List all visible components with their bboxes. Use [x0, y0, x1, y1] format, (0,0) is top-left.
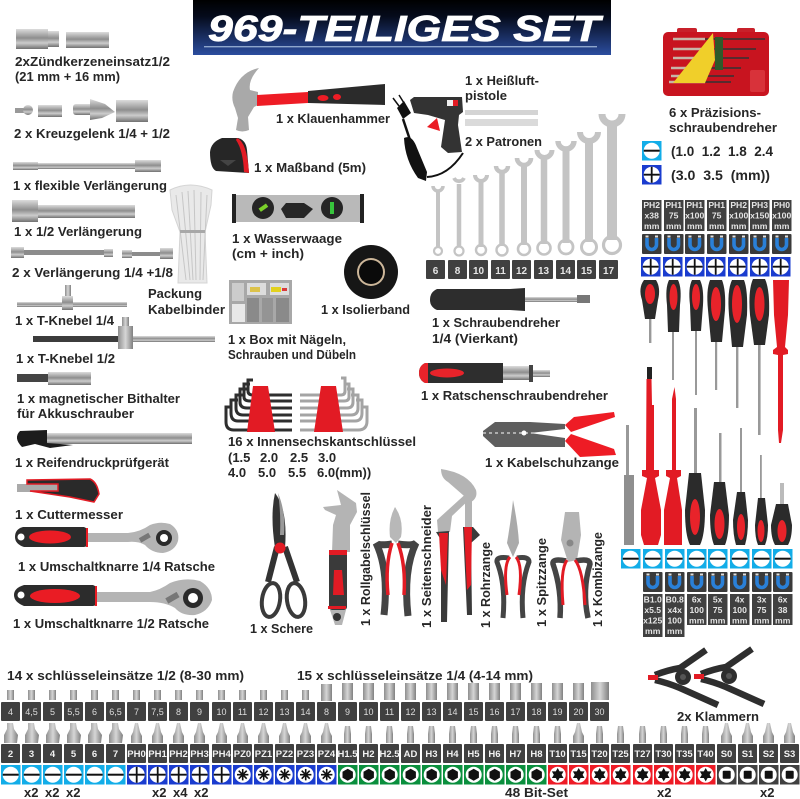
slotted screwdriver size labels: B1.0: [644, 594, 662, 604]
hot glue gun: 1 x Heißluft-: [465, 73, 539, 88]
wrench size labels: 14: [560, 266, 571, 277]
bit size labels: PH1: [148, 749, 167, 760]
Phillips screwdriver size labels: x100: [685, 210, 704, 220]
Phillips screwdriver size labels: mm: [687, 221, 703, 231]
slotted screwdriver size labels: mm: [710, 616, 726, 626]
bit size labels: H2.5: [379, 749, 400, 760]
bit size labels: H7: [509, 749, 522, 760]
glue sticks: [465, 110, 542, 149]
cutter knife: [15, 479, 123, 522]
socket size labels: 8: [176, 707, 181, 717]
tape measure: [210, 138, 366, 175]
slotted screwdriver size labels: 100: [690, 605, 704, 615]
socket size labels: 11: [238, 707, 247, 717]
slotted screwdriver size labels: 4x: [735, 594, 745, 604]
precision driver sizes: (1.0 1.2 1.8 2.4: [671, 144, 773, 159]
socket size labels: 19: [552, 707, 563, 717]
slotted screwdriver size labels: 3x: [757, 594, 767, 604]
Phillips screwdriver size labels: mm: [731, 221, 747, 231]
box of nails, screws and dowels: 1 x Box mit Nägeln,: [228, 332, 346, 347]
Phillips icons top row: [641, 257, 790, 276]
slotted screwdriver size labels: mm: [732, 616, 748, 626]
bit size labels: PZ3: [297, 749, 314, 760]
bit size labels: T40: [697, 749, 714, 760]
socket size labels: 5: [50, 707, 55, 717]
hex key sizes: 2.0: [260, 450, 278, 465]
bit size labels: 7: [113, 749, 118, 760]
hex key sizes: (1.5: [228, 450, 250, 465]
long nose pliers: [497, 500, 549, 627]
bit size labels: 3: [29, 749, 34, 760]
precision screwdriver case: schraubendreher: [669, 120, 777, 135]
Phillips screwdriver size labels: PH1: [686, 200, 703, 210]
bit images row: [4, 723, 795, 743]
ratchet 1/2: [13, 579, 212, 631]
spark plug sockets: [15, 29, 170, 84]
flexible extension: [13, 160, 167, 193]
slotted screwdriver size labels: mm: [775, 616, 791, 626]
bit size labels: S0: [721, 749, 732, 760]
title banner: [193, 0, 611, 55]
spark plug sockets: (21 mm + 16 mm): [15, 69, 120, 84]
cable ties: [148, 185, 225, 317]
combination pliers: 1 x Kombizange: [590, 532, 605, 627]
Phillips screwdriver size labels: 75: [669, 210, 679, 220]
box of nails, screws and dowels: [228, 280, 356, 362]
socket images row: [7, 682, 609, 701]
socket size labels: 17: [510, 707, 521, 717]
bit size labels: H4: [446, 749, 459, 760]
hex key sizes: 5.5: [288, 465, 306, 480]
bit size labels: T25: [612, 749, 629, 760]
bit quantity notes: [24, 785, 774, 799]
Phillips screwdriver size labels: x100: [772, 210, 791, 220]
wrench size labels: 10: [473, 266, 484, 277]
Phillips screwdriver size labels: PH1: [665, 200, 682, 210]
Phillips screwdriver size labels: x38: [645, 210, 659, 220]
slotted screwdriver size labels: 100: [668, 616, 682, 626]
bit size labels: T30: [655, 749, 672, 760]
wrench size labels: 6: [433, 266, 439, 277]
T-handle 1/2: 1 x T-Knebel 1/2: [16, 351, 115, 366]
combination wrenches: [433, 114, 622, 256]
socket size labels: 10: [216, 707, 227, 717]
slotted screwdriver size labels: 38: [778, 605, 788, 615]
bit size labels: S3: [784, 749, 795, 760]
clamp caption: 2x Klammern: [677, 709, 759, 724]
slotted screwdriver size labels: mm: [689, 616, 705, 626]
insulating tape: 1 x Isolierband: [321, 302, 410, 317]
bit size labels: H1.5: [337, 749, 358, 760]
1/2 extension: 1 x 1/2 Verlängerung: [14, 224, 142, 239]
ratchet 1/4: [15, 523, 215, 574]
Phillips screwdriver size labels: mm: [644, 221, 660, 231]
bit size labels: PH0: [127, 749, 146, 760]
socket size labels: 12: [258, 707, 269, 717]
wrench size labels: 17: [603, 266, 614, 277]
precision driver sizes: [642, 141, 773, 184]
bit size labels: T27: [634, 749, 651, 760]
hex key sizes: 16 x Innensechskantschlüssel: [228, 434, 416, 449]
magnet icons bottom row: [643, 572, 792, 592]
bit size labels: [1, 744, 799, 763]
slotted screwdriver size labels: B0.8: [666, 594, 684, 604]
socket size labels: 14: [300, 707, 311, 717]
socket set captions: 15 x schlüsseleinsätze 1/4 (4-14 mm): [297, 668, 533, 683]
slotted icons row: [621, 549, 792, 568]
1/4 and 1/8 extensions: 2 x Verlängerung 1/4 +1/8: [12, 265, 173, 280]
T-handle 1/2: [16, 317, 215, 366]
bit size labels: 5: [71, 749, 77, 760]
hex key sizes: [228, 434, 416, 480]
bit size labels: AD: [404, 749, 417, 760]
ratchet screwdriver: 1 x Ratschenschraubendreher: [421, 388, 608, 403]
magnetic bit holder: 1 x magnetischer Bithalter: [17, 391, 180, 406]
socket size labels: 16: [489, 707, 500, 717]
spark plug sockets: 2xZündkerzeneinsatz1/2: [15, 54, 170, 69]
Phillips screwdriver size labels: x150: [750, 210, 769, 220]
1/2 extension: [12, 200, 142, 239]
wrench size labels: 13: [538, 266, 549, 277]
slotted screwdriver size labels: x4x: [668, 605, 682, 615]
Phillips screwdriver size labels: mm: [666, 221, 682, 231]
flexible extension: 1 x flexible Verlängerung: [13, 178, 167, 193]
box of nails, screws and dowels: Schrauben und Dübeln: [228, 347, 356, 362]
ratchet 1/2: 1 x Umschaltknarre 1/2 Ratsche: [13, 616, 209, 631]
wrench size labels: 11: [495, 266, 506, 277]
ratchet screwdriver: [419, 363, 608, 403]
socket size labels: 15: [468, 707, 479, 717]
bit size labels: 4: [50, 749, 56, 760]
bit size labels: H3: [425, 749, 438, 760]
Phillips screwdriver size labels: PH0: [773, 200, 790, 210]
spirit level: 1 x Wasserwaage: [232, 231, 342, 246]
Phillips screwdriver size labels: mm: [774, 221, 790, 231]
socket size labels: 12: [405, 707, 416, 717]
tape measure: 1 x Maßband (5m): [254, 160, 366, 175]
wrench size labels: [426, 260, 618, 279]
bit size labels: H2: [362, 749, 375, 760]
socket size labels: [1, 702, 609, 721]
spring clamps: [648, 649, 764, 705]
square drive screwdriver: 1 x Schraubendreher: [432, 315, 560, 330]
slotted screwdriver size labels: 6x: [778, 594, 788, 604]
socket size labels: 11: [385, 707, 394, 717]
combination pliers: [553, 512, 605, 627]
socket size labels: 7: [134, 707, 139, 717]
bit size labels: S2: [763, 749, 774, 760]
hex key sizes: 5.0: [258, 465, 276, 480]
wrench size labels: 12: [516, 266, 527, 277]
square drive screwdriver: [430, 288, 590, 346]
socket set captions: 14 x schlüsseleinsätze 1/2 (8-30 mm): [7, 668, 244, 683]
bit size labels: PZ1: [255, 749, 273, 760]
bit size labels: T20: [591, 749, 608, 760]
socket size labels: 13: [279, 707, 290, 717]
Phillips screwdriver size labels: PH2: [643, 200, 660, 210]
bit size labels: 6: [92, 749, 97, 760]
Phillips screwdriver size labels: mm: [752, 221, 768, 231]
wrench size labels: 15: [581, 266, 592, 277]
socket size labels: 13: [426, 707, 437, 717]
scissors: 1 x Schere: [250, 621, 313, 636]
water pump pliers: [436, 469, 493, 628]
ratchet 1/4: 1 x Umschaltknarre 1/4 Ratsche: [18, 559, 215, 574]
precision screwdriver case: [663, 28, 777, 135]
title banner: 969-TEILIGES SET: [208, 8, 604, 49]
spirit level: (cm + inch): [232, 246, 304, 261]
tyre pressure gauge: [15, 430, 192, 470]
hex key sizes: 6.0(mm)): [317, 465, 371, 480]
crimping pliers: [483, 412, 619, 470]
Phillips screwdrivers: [640, 279, 789, 443]
slotted screwdriver size labels: x5.5: [644, 605, 661, 615]
slotted screwdriver size labels: mm: [667, 626, 683, 636]
claw hammer: [232, 68, 390, 132]
slotted screwdriver size labels: x125: [643, 616, 662, 626]
socket size labels: 10: [363, 707, 374, 717]
Phillips screwdriver size labels: [642, 200, 792, 231]
Phillips screwdriver size labels: PH1: [708, 200, 725, 210]
bit head icons row: [1, 765, 800, 784]
socket size labels: 7,5: [151, 707, 164, 717]
cutter knife: 1 x Cuttermesser: [15, 507, 123, 522]
hex key sizes: 4.0: [228, 465, 246, 480]
square drive screwdriver: 1/4 (Vierkant): [432, 331, 518, 346]
magnetic bit holder: für Akkuschrauber: [17, 406, 134, 421]
hex key set: [226, 378, 367, 432]
precision driver sizes: (3.0 3.5 (mm)): [671, 168, 770, 183]
socket size labels: 4: [8, 707, 13, 717]
socket size labels: 5,5: [67, 707, 80, 717]
hex key sizes: 2.5: [290, 450, 308, 465]
bit size labels: PZ4: [318, 749, 336, 760]
socket size labels: 30: [594, 707, 605, 717]
bit size labels: PZ0: [234, 749, 251, 760]
water pump pliers: 1 x Rohrzange: [478, 542, 493, 628]
T-handle 1/4: [15, 285, 127, 328]
slotted screwdriver size labels: [643, 594, 792, 637]
slotted screwdriver size labels: 100: [733, 605, 747, 615]
socket set captions: [7, 668, 533, 683]
slotted screwdriver size labels: 75: [713, 605, 723, 615]
adjustable wrench: 1 x Rollgabelschlüssel: [358, 492, 373, 626]
bit size labels: PZ2: [276, 749, 293, 760]
bit size labels: PH3: [190, 749, 209, 760]
bit size labels: T10: [549, 749, 566, 760]
precision screwdriver case: 6 x Präzisions-: [669, 105, 761, 120]
socket size labels: 6,5: [109, 707, 122, 717]
hot glue gun: pistole: [465, 88, 507, 103]
bit size labels: PH4: [212, 749, 231, 760]
wrench size labels: 8: [455, 266, 461, 277]
bit size labels: H5: [467, 749, 480, 760]
socket size labels: 14: [447, 707, 458, 717]
slotted screwdriver size labels: 6x: [692, 594, 702, 604]
glue sticks: 2 x Patronen: [465, 134, 542, 149]
bit size labels: H8: [530, 749, 543, 760]
Phillips screwdriver size labels: mm: [709, 221, 725, 231]
tyre pressure gauge: 1 x Reifendruckprüfgerät: [15, 455, 170, 470]
slotted screwdriver size labels: 5x: [713, 594, 723, 604]
bit size labels: T15: [570, 749, 587, 760]
cable ties: Packung: [148, 286, 202, 301]
hot glue gun: [393, 73, 539, 181]
slotted screwdriver size labels: 75: [757, 605, 767, 615]
Phillips screwdriver size labels: 75: [712, 210, 722, 220]
socket size labels: 8: [324, 707, 329, 717]
bit size labels: 2: [8, 749, 13, 760]
bit size labels: T35: [676, 749, 693, 760]
socket size labels: 9: [345, 707, 350, 717]
bit size labels: S1: [742, 749, 754, 760]
T-handle 1/4: 1 x T-Knebel 1/4: [15, 313, 115, 328]
socket size labels: 4,5: [25, 707, 38, 717]
scissors: [250, 493, 313, 636]
universal joints: [14, 99, 170, 141]
flat screwdrivers: [624, 367, 792, 545]
1/4 and 1/8 extensions: [11, 247, 173, 280]
adjustable wrench: [323, 490, 373, 626]
bit size labels: H6: [488, 749, 501, 760]
crimping pliers: 1 x Kabelschuhzange: [485, 455, 619, 470]
side cutters: [376, 505, 434, 628]
Phillips screwdriver size labels: PH2: [730, 200, 747, 210]
socket size labels: 6: [92, 707, 97, 717]
socket size labels: 18: [531, 707, 542, 717]
magnet icons top row: [642, 234, 792, 254]
spirit level: [232, 194, 364, 261]
socket size labels: 20: [573, 707, 584, 717]
insulating tape: [321, 245, 410, 317]
universal joints: 2 x Kreuzgelenk 1/4 + 1/2: [14, 126, 170, 141]
side cutters: 1 x Seitenschneider: [419, 505, 434, 628]
Phillips screwdriver size labels: x100: [729, 210, 748, 220]
bit size labels: PH2: [169, 749, 188, 760]
slotted screwdriver size labels: mm: [754, 616, 770, 626]
socket size labels: 9: [197, 707, 202, 717]
cable ties: Kabelbinder: [148, 302, 225, 317]
long nose pliers: 1 x Spitzzange: [534, 538, 549, 627]
hex key sizes: 3.0: [318, 450, 336, 465]
Phillips screwdriver size labels: PH3: [751, 200, 768, 210]
claw hammer: 1 x Klauenhammer: [276, 111, 390, 126]
magnetic bit holder: [17, 372, 180, 421]
slotted screwdriver size labels: mm: [645, 626, 661, 636]
